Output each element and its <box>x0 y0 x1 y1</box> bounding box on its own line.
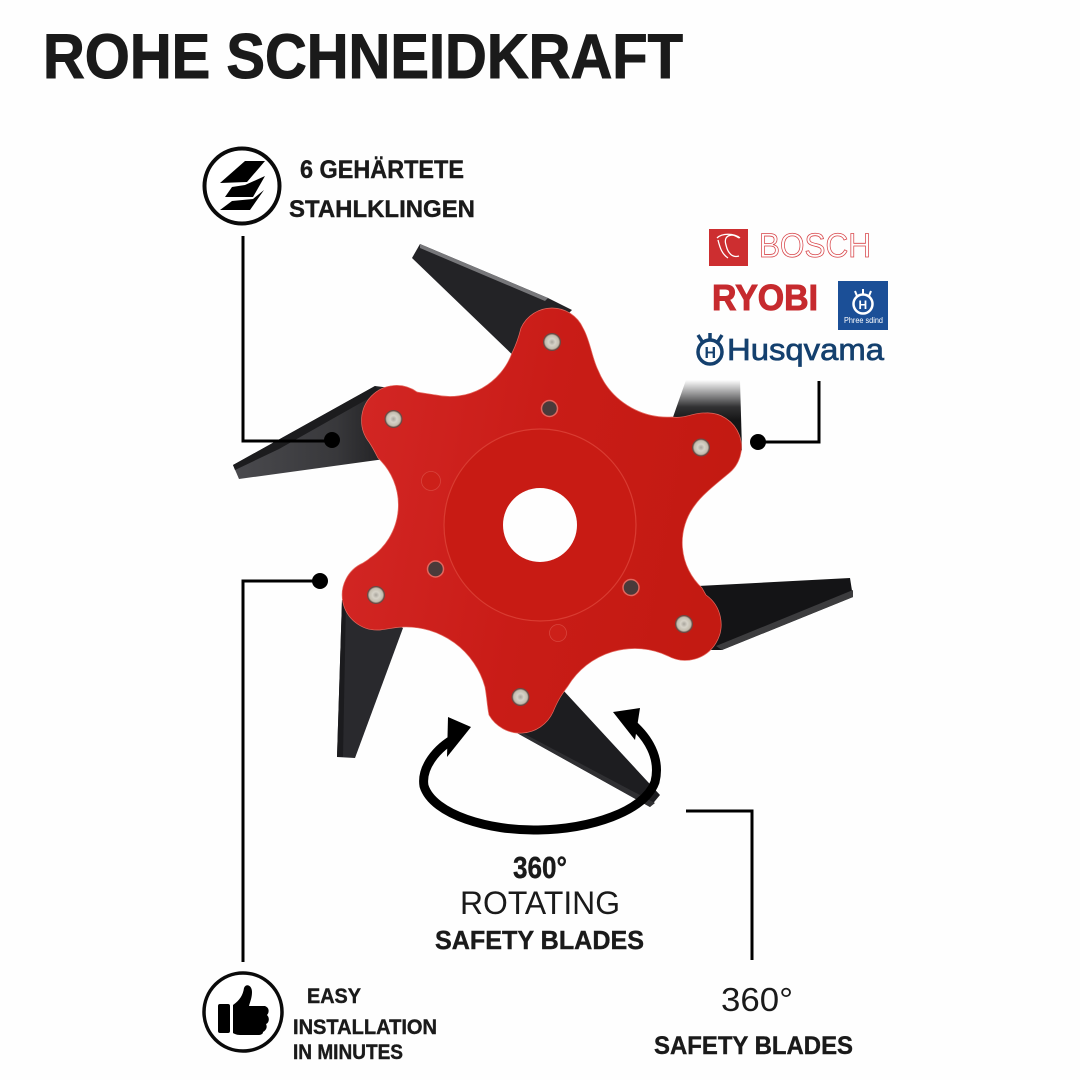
title: ROHE SCHNEIDKRAFT <box>43 22 683 92</box>
callout line: blades <box>243 236 340 448</box>
text: 360 rotating safety blades: ROTATING <box>460 885 620 921</box>
center hole <box>503 488 577 562</box>
text: 360 safety blades: 360° <box>721 981 793 1018</box>
logos: compatible brands <box>698 227 888 367</box>
callout line: easy installation <box>243 573 328 962</box>
text: 360 rotating safety blades: SAFETY BLADES <box>435 925 644 955</box>
text: 360 safety blades: SAFETY BLADES <box>654 1032 853 1060</box>
logo: Bosch: BOSCH <box>759 227 871 265</box>
text: 360 rotating safety blades: 360° <box>513 850 567 885</box>
text: 360 safety blades <box>654 981 853 1060</box>
logo: Bosch <box>709 227 871 266</box>
dimples <box>422 472 566 642</box>
blade: right <box>698 578 853 650</box>
blade: lower left <box>337 600 403 758</box>
product: six-blade cutter head <box>233 244 853 807</box>
text: hardened steel blades <box>289 156 475 223</box>
logo: blue badge: Phree sdind <box>844 316 883 325</box>
callout line: brands <box>750 381 819 450</box>
bolts <box>368 334 710 706</box>
logo: blue badge: H <box>858 298 867 312</box>
blade: left <box>233 386 405 479</box>
blade: right upper fading <box>672 380 742 470</box>
red mounting plate <box>342 308 741 733</box>
blade: upper left <box>412 244 572 362</box>
icon: stacked layers <box>204 148 280 224</box>
text: easy installation <box>293 985 437 1064</box>
text: hardened steel blades: 6 GEHÄRTETE <box>300 156 464 184</box>
text: easy installation: IN MINUTES <box>293 1041 403 1064</box>
text: 360 rotating safety blades <box>435 850 644 955</box>
logo: Ryobi: RYOBI <box>712 277 818 318</box>
logo: Husqvama: H <box>704 345 716 362</box>
mounting holes <box>428 400 639 596</box>
blade: bottom <box>517 690 660 807</box>
text: hardened steel blades: STAHLKLINGEN <box>289 196 475 223</box>
callout line: safety blades <box>686 811 752 960</box>
rotation arrow <box>424 708 656 830</box>
text: easy installation: EASY <box>307 985 361 1008</box>
logo: blue badge <box>838 281 888 330</box>
icon: thumbs up <box>204 973 282 1051</box>
center ring <box>444 429 636 621</box>
text: easy installation: INSTALLATION <box>293 1016 437 1039</box>
logo: Husqvama: Husqvama <box>727 332 885 367</box>
